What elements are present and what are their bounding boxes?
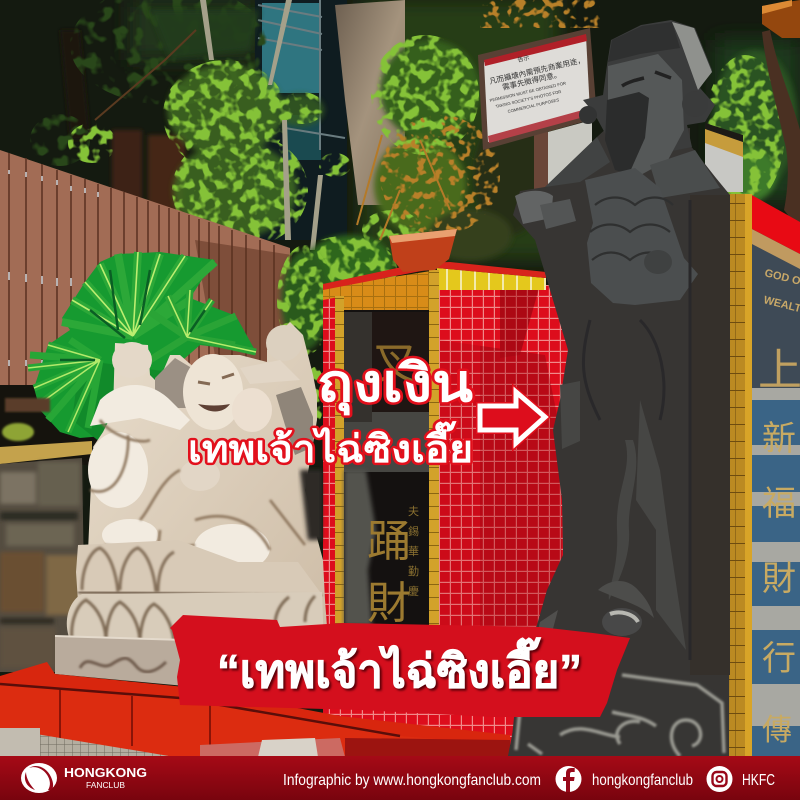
black plaque with characters: 錫 <box>408 524 419 538</box>
statue robe folds <box>532 200 690 660</box>
headline <box>188 355 474 471</box>
arrow pointing to stone statue <box>480 392 545 443</box>
icon: Hong Kong Fanclub logo <box>21 763 57 793</box>
credit text: Infographic by www.hongkongfanclub.com <box>283 772 541 789</box>
building windows <box>255 0 347 240</box>
banner title: “เทพเจ้าไฉ่ซิงเอี๊ย” <box>217 637 582 697</box>
sign board: 需事先徵得同意。 <box>501 69 562 92</box>
red platform <box>0 662 510 757</box>
right wall panel: 財 <box>762 560 796 598</box>
black plaque with characters: 勤 <box>408 565 419 578</box>
black plaque with characters: 慶 <box>408 584 419 598</box>
gold mosaic edge <box>729 194 752 756</box>
footer bar <box>0 756 800 800</box>
marble laughing statue <box>55 322 328 686</box>
stone god of wealth statue <box>508 20 730 756</box>
logo wordmark: FANCLUB <box>86 781 125 790</box>
foliage centre right of building <box>293 0 600 304</box>
upper lotus base <box>76 540 322 602</box>
right wall panel: 行 <box>762 640 796 678</box>
black plaque with characters: 財 <box>367 579 411 628</box>
black plaque with characters: 叉 <box>372 338 418 390</box>
black plaque with characters: 華 <box>408 545 419 558</box>
headline: money bag: ถุงเงิน <box>317 355 474 416</box>
right wall panel <box>729 194 800 756</box>
bamboo rail and rocks on stone wall <box>0 398 92 464</box>
orange bowl <box>389 229 457 272</box>
statue limbs and folds <box>88 360 300 572</box>
sign board: COMMERCIAL PURPOSES <box>507 97 560 114</box>
child heads <box>112 325 302 491</box>
facebook handle: hongkongfanclub <box>592 772 693 789</box>
black plaque with characters <box>344 310 429 628</box>
fish and shadowed parts <box>276 387 313 455</box>
statue head and crown <box>579 20 715 182</box>
sign board: TAKING SOCIETY'S PHOTOS FOR <box>495 89 562 109</box>
tree trunks behind fence <box>60 30 186 230</box>
dark foliage top left <box>30 0 270 166</box>
instagram handle: HKFC <box>742 772 775 789</box>
small gold pillar behind statue <box>705 123 743 192</box>
icon: instagram <box>706 766 732 792</box>
big face <box>183 354 243 430</box>
sign board: 凡而攝塘內需預先商業用途， <box>488 54 585 86</box>
logo wordmark: HONGKONG <box>64 766 147 780</box>
stone wall <box>0 458 85 672</box>
black plaque with characters: 夫 <box>408 505 419 518</box>
headline: god name: เทพเจ้าไฉ่ซิงเอี๊ย <box>188 421 473 471</box>
beige building wall <box>335 0 405 205</box>
statue shoulders and sleeve <box>515 137 720 305</box>
logo wordmark <box>64 766 147 790</box>
icon: facebook <box>556 766 582 792</box>
wooden fence <box>0 150 292 465</box>
sign board: PERMISSION MUST BE OBTAINED FOR <box>489 80 566 103</box>
red mosaic box <box>323 229 569 745</box>
lower lotus base <box>67 592 324 647</box>
statue base with scrolls <box>508 675 728 756</box>
statue body <box>510 125 730 756</box>
statue silhouette <box>68 322 328 642</box>
bright bamboo foliage <box>68 0 351 250</box>
palm plant <box>28 252 256 442</box>
shrubs beside red box <box>277 245 333 423</box>
marble plinth <box>55 636 185 686</box>
sign board <box>478 28 597 192</box>
right wall panel: 新 <box>762 420 796 458</box>
sign board: 告示 <box>517 53 530 64</box>
right tree and roof corner <box>705 0 800 230</box>
black plaque with characters: 踊 <box>367 517 411 566</box>
red brush banner <box>170 615 630 717</box>
right wall panel: 傳 <box>762 714 792 747</box>
right wall panel: 福 <box>762 485 796 523</box>
gold tile top band <box>323 262 546 640</box>
